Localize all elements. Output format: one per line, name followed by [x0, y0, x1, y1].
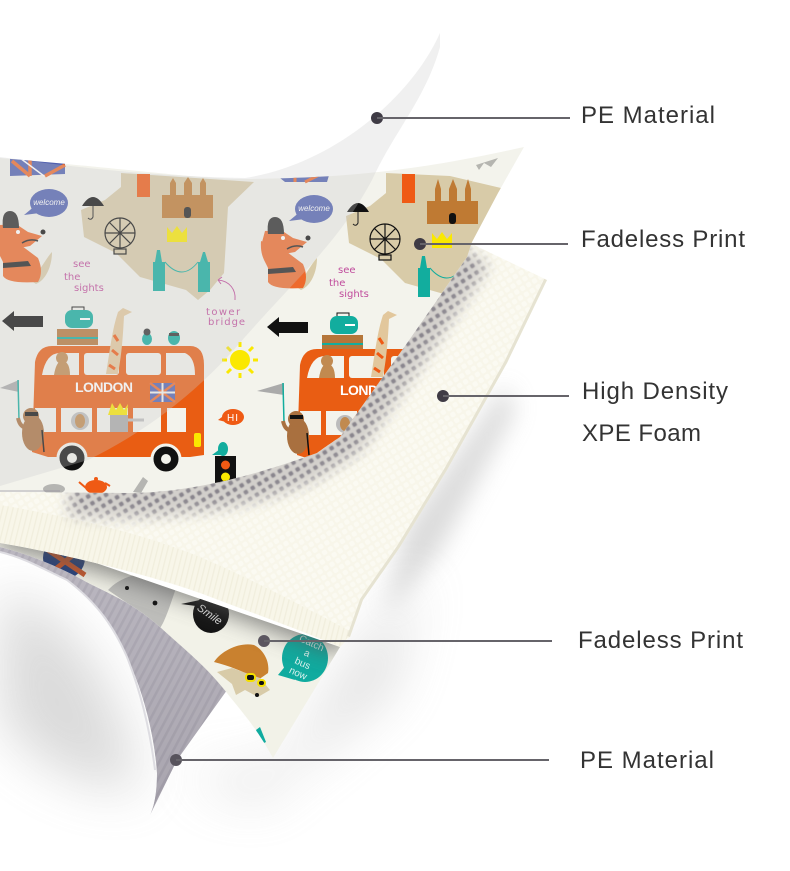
label: PE Material (bottom): PE Material — [580, 747, 714, 774]
black speech bubble: Smile — [195, 602, 224, 628]
headlamp — [194, 433, 201, 447]
hippo print — [108, 574, 178, 628]
umbrella — [82, 197, 104, 219]
shadow from foam — [0, 530, 345, 640]
teal speech bubble — [278, 634, 328, 684]
label: Fadeless Print (top): Fadeless Print — [581, 226, 745, 253]
welcome bubble — [24, 189, 68, 217]
tower bridge — [153, 250, 210, 292]
print scene: right copy, upper: the — [329, 278, 345, 289]
teal speech bubble: bus — [293, 656, 312, 672]
teapot — [79, 477, 110, 494]
seagull fragment — [476, 158, 498, 170]
wheels — [58, 444, 180, 473]
teal speech bubble: now — [287, 665, 309, 683]
HI bubble — [218, 409, 244, 425]
tower bridge note — [206, 277, 246, 328]
label: High Density XPE Foam — [437, 378, 728, 447]
teal speech bubble: Catch — [297, 634, 325, 654]
crown — [167, 226, 187, 242]
print scene: left bus: LONDON — [75, 379, 133, 395]
print scene: left copy, upper — [0, 158, 258, 494]
birds — [142, 328, 180, 345]
tower bridge note: tower — [206, 307, 241, 318]
suitcases — [57, 307, 98, 345]
see the sights: see — [73, 259, 91, 270]
elephants — [71, 403, 144, 432]
map of London — [81, 173, 254, 300]
tower bridge note: bridge — [208, 317, 246, 328]
union flag — [10, 158, 65, 176]
print scene: right copy, upper: sights — [339, 289, 369, 300]
label: PE Material (top) — [371, 102, 715, 129]
giraffe — [106, 308, 132, 374]
see the sights: the — [64, 272, 80, 283]
grey fragments — [43, 477, 148, 494]
print scene: right copy, upper — [261, 172, 501, 351]
union flag print — [43, 552, 86, 578]
print scene: left bus — [0, 308, 204, 473]
castle — [162, 177, 213, 218]
label: High Density XPE Foam: XPE Foam — [582, 420, 701, 447]
print edge shade — [0, 490, 60, 492]
fox — [0, 211, 52, 284]
bear in window — [54, 352, 70, 375]
ferris wheel — [105, 218, 135, 254]
label: PE Material (bottom) — [170, 747, 714, 774]
black speech bubble — [181, 595, 229, 633]
print scene: right copy, upper: welcome — [298, 204, 330, 213]
label: Fadeless Print (bottom): Fadeless Print — [578, 627, 743, 654]
see the sights: sights — [74, 283, 104, 294]
print scene: right copy, upper: see — [338, 265, 356, 276]
label: Fadeless Print (bottom) — [258, 627, 743, 654]
red tower — [137, 174, 150, 197]
bottom PE material sheet — [0, 547, 227, 815]
foam front ribbed edge — [0, 505, 352, 647]
XPE foam layer — [0, 245, 547, 647]
foam grey shaded dimples — [60, 245, 494, 527]
label: PE Material (top): PE Material — [581, 102, 715, 129]
drop shadows — [0, 385, 515, 800]
hedgehog print — [214, 644, 270, 697]
label: High Density XPE Foam: High Density — [582, 378, 728, 405]
sun — [222, 342, 258, 378]
bus flag — [150, 383, 175, 402]
monkey with flag — [0, 380, 44, 452]
welcome bubble: welcome — [33, 198, 65, 207]
HI bubble: HI — [227, 413, 239, 424]
print scene: right bus — [257, 311, 469, 475]
label: Fadeless Print (top) — [414, 226, 745, 253]
top printed sheet — [0, 147, 524, 494]
black arrow — [2, 311, 43, 331]
teal fragment — [256, 727, 266, 743]
print scene: right bus: LONDON — [340, 382, 398, 398]
see the sights — [64, 262, 104, 293]
teal speech bubble: a — [302, 648, 312, 660]
top PE material sheet — [0, 33, 440, 486]
traffic light — [212, 442, 236, 483]
foam side edge — [350, 280, 547, 637]
bottom printed sheet — [0, 530, 345, 758]
